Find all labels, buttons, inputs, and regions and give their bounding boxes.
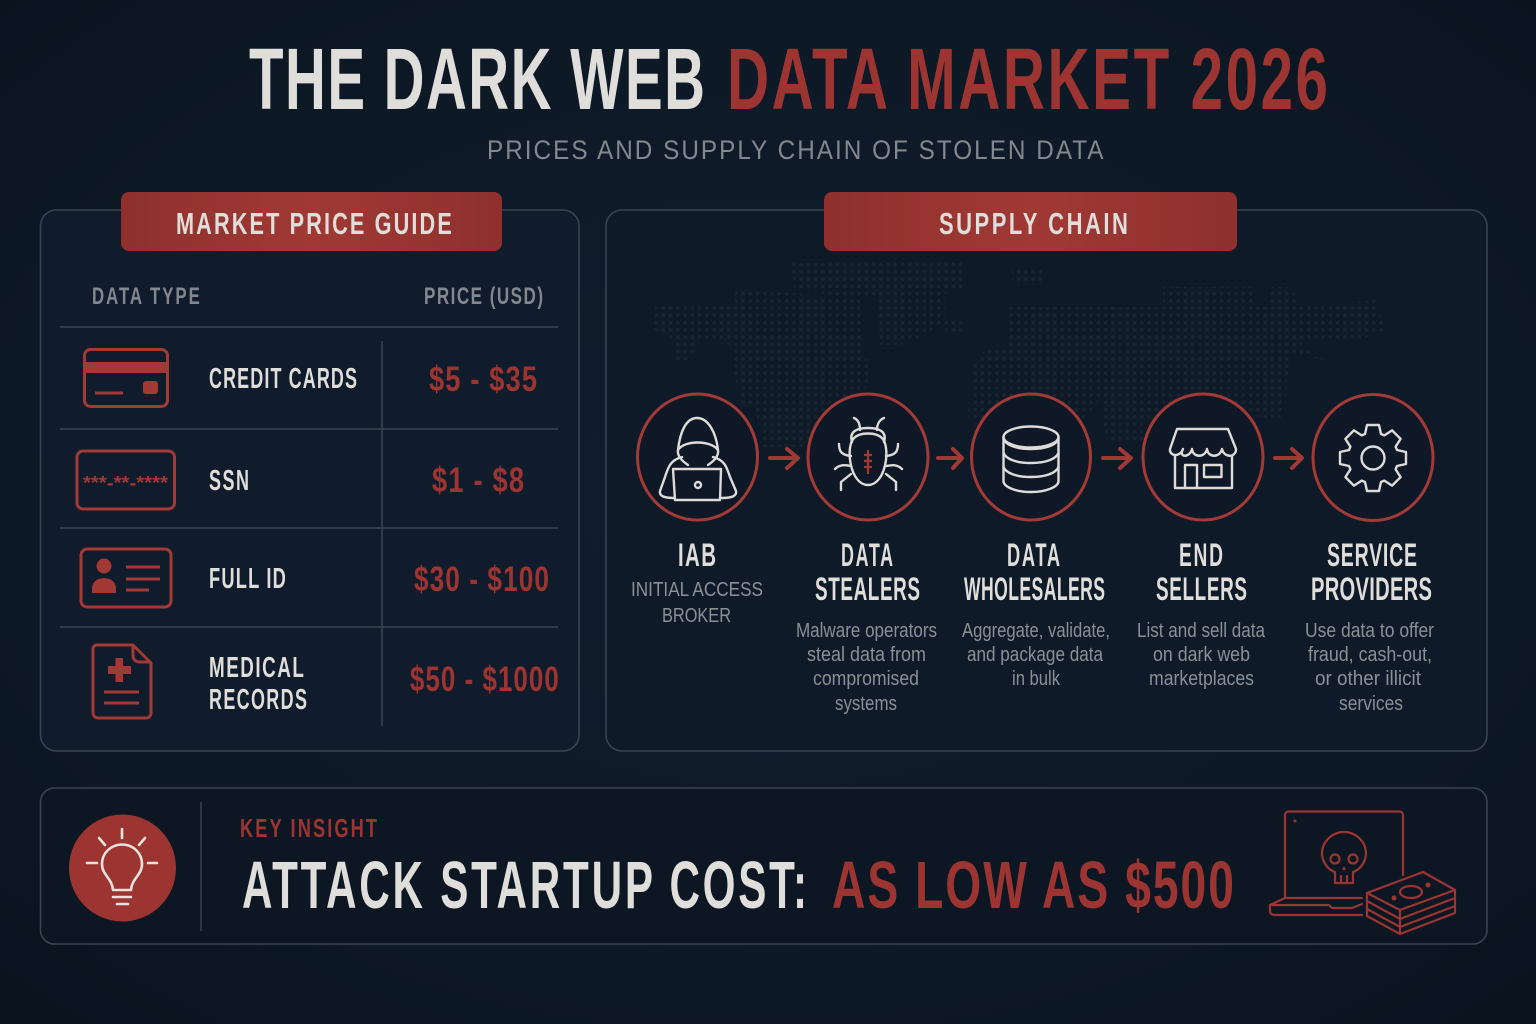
- heading: market price guide: [121, 192, 502, 251]
- stage: data stealers: [796, 394, 937, 715]
- row: credit cards: [84, 350, 537, 406]
- row: medical records: [93, 645, 559, 718]
- row: full id: $30 - $100: [414, 559, 549, 599]
- heading: market price guide: MARKET PRICE GUIDE: [176, 206, 452, 241]
- stage: service providers: services: [1339, 693, 1403, 715]
- stage: data wholesalers: and package data: [967, 644, 1104, 666]
- panel: supply chain: [606, 192, 1487, 751]
- icon: id card: [81, 549, 171, 607]
- stage: service providers: SERVICE: [1327, 537, 1417, 573]
- heading: supply chain: [824, 192, 1237, 251]
- icon: gear: [1313, 394, 1433, 520]
- icon: laptop with skull and cash: [1270, 812, 1455, 934]
- icon: database: [972, 394, 1090, 520]
- stage: data stealers: Malware operators: [796, 620, 937, 642]
- arrow: [770, 449, 798, 468]
- stage: end sellers: SELLERS: [1156, 571, 1247, 607]
- icon: hooded hacker: [638, 394, 758, 520]
- headline: attack startup cost: ATTACK STARTUP COST:: [242, 847, 807, 922]
- stage: data wholesalers: [962, 394, 1110, 690]
- stage: data stealers: systems: [835, 693, 897, 715]
- stage: end sellers: List and sell data: [1137, 620, 1266, 642]
- stage: data stealers: steal data from: [807, 644, 926, 666]
- panel: market price guide: [40, 192, 579, 751]
- icon: ssn card: [77, 451, 174, 509]
- title: [249, 30, 1328, 128]
- world map dots: [654, 258, 1385, 480]
- icon: bug: [808, 394, 928, 520]
- icon: storefront: [1143, 394, 1263, 520]
- panel: key insight: [40, 788, 1487, 944]
- row: medical records: RECORDS: [209, 684, 307, 716]
- headline: attack startup cost: AS LOW AS $500: [832, 849, 1234, 923]
- stage: IAB: INITIAL ACCESS: [631, 579, 763, 601]
- stage: IAB: IAB: [678, 537, 716, 573]
- stage: end sellers: marketplaces: [1149, 668, 1254, 690]
- stage: data wholesalers: DATA: [1007, 537, 1060, 573]
- stage: data stealers: STEALERS: [815, 571, 920, 607]
- icon: medical document: [93, 645, 151, 718]
- row: full id: [81, 549, 549, 607]
- stage: IAB: BROKER: [662, 605, 731, 627]
- headline: attack startup cost: [242, 847, 1234, 923]
- icon: ssn card: ***-**-****: [83, 473, 168, 493]
- title: DATA MARKET 2026: [727, 30, 1328, 128]
- stage: data wholesalers: in bulk: [1012, 668, 1061, 690]
- stage: end sellers: [1137, 394, 1266, 690]
- stage: service providers: Use data to offer: [1305, 620, 1434, 642]
- icon: credit card: [84, 350, 168, 406]
- row: credit cards: $5 - $35: [429, 360, 537, 399]
- row: full id: FULL ID: [209, 563, 286, 595]
- stage: end sellers: END: [1179, 537, 1223, 573]
- stage: service providers: [1305, 394, 1434, 715]
- row: medical records: MEDICAL: [209, 652, 304, 684]
- stage: IAB: [631, 394, 763, 627]
- arrow: [1275, 449, 1302, 468]
- row: ssn: SSN: [209, 465, 249, 497]
- stage: service providers: fraud, cash-out,: [1308, 644, 1432, 666]
- arrow: [938, 449, 962, 468]
- table column headers: PRICE (USD): [424, 283, 543, 310]
- heading: supply chain: SUPPLY CHAIN: [939, 206, 1128, 241]
- stage: data stealers: DATA: [841, 539, 893, 573]
- row: credit cards: CREDIT CARDS: [209, 363, 357, 395]
- subtitle: PRICES AND SUPPLY CHAIN OF STOLEN DATA: [487, 136, 1104, 165]
- stage: service providers: PROVIDERS: [1311, 571, 1432, 607]
- label: key insight: KEY INSIGHT: [240, 814, 377, 843]
- table column headers: DATA TYPE: [92, 283, 200, 310]
- icon: light bulb: [69, 814, 176, 922]
- stage: data stealers: compromised: [813, 668, 919, 690]
- stage: data wholesalers: WHOLESALERS: [964, 573, 1105, 607]
- stage: service providers: or other illicit: [1315, 668, 1421, 690]
- row: medical records: $50 - $1000: [410, 659, 559, 699]
- title: THE DARK WEB: [249, 31, 705, 128]
- arrow: [1103, 449, 1131, 468]
- stage: end sellers: on dark web: [1153, 644, 1250, 666]
- row: ssn: $1 - $8: [432, 461, 524, 500]
- stage: data wholesalers: Aggregate, validate,: [962, 620, 1110, 642]
- row: ssn: [77, 451, 524, 509]
- table column headers: [92, 283, 543, 310]
